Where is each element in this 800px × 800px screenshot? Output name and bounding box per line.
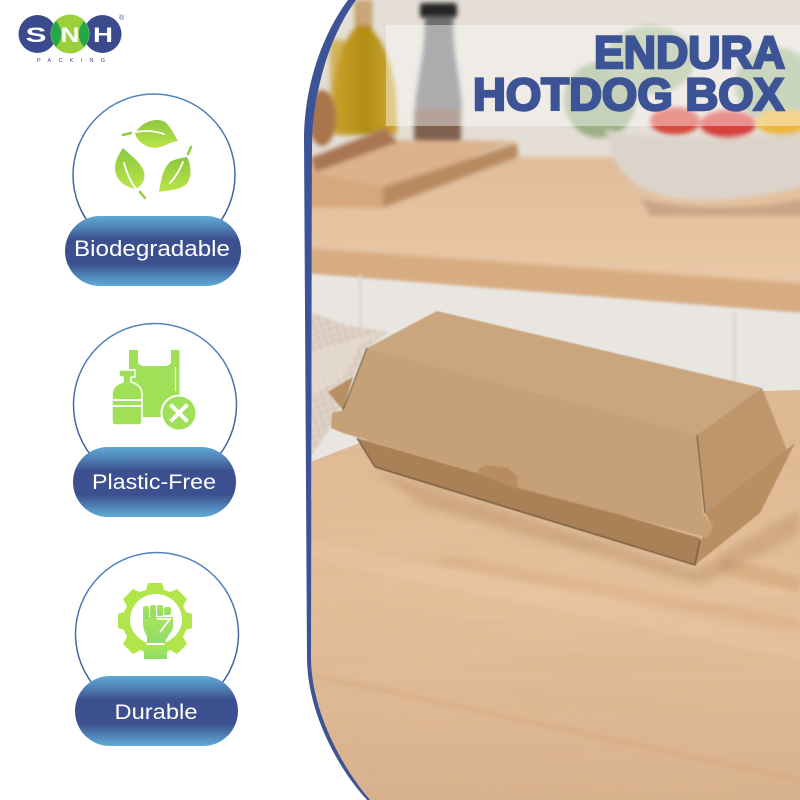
box: closure tab [477, 465, 518, 489]
logo: SNH Packing [18, 14, 125, 64]
circle outline [74, 324, 236, 486]
box: top face [367, 311, 762, 435]
photo: counter top [280, 107, 800, 316]
icon: fist in gear [118, 583, 192, 659]
photo: bowl and fruit [641, 198, 800, 217]
photo: cutting board [312, 172, 386, 210]
photo: checkered towel [311, 312, 387, 456]
circle outline [76, 552, 238, 716]
label text: Biodegradable [74, 236, 230, 261]
photo: box shadow [375, 470, 800, 585]
logo: SNH Packing: H [93, 24, 113, 47]
title band [386, 25, 800, 126]
box: right side face [697, 388, 787, 513]
logo: SNH Packing: PACKING [37, 58, 105, 64]
icon: bag and bottle with cross [112, 350, 198, 432]
photo: kitchen wall [300, 0, 800, 320]
hotdog box [328, 311, 795, 565]
photo: wooden table [300, 390, 800, 800]
feature: Durable [75, 552, 238, 746]
feature: Plastic-Free [73, 324, 236, 517]
title: HOTDOG BOX [473, 69, 784, 120]
title [473, 27, 785, 120]
logo: SNH Packing: N [60, 24, 80, 47]
box: right flap [695, 443, 795, 565]
label pill [65, 216, 241, 286]
feature: Biodegradable [65, 94, 241, 286]
photo: blurred background objects [308, 0, 800, 146]
panel border: blue arc [304, 0, 800, 800]
logo: SNH Packing: S [26, 24, 46, 47]
label pill [73, 447, 236, 517]
box: left flap [328, 377, 353, 410]
logo: SNH Packing: ® [119, 14, 125, 22]
circle outline [73, 94, 235, 256]
icon: three leaves recycling [115, 120, 191, 198]
photo: lower cabinet [280, 272, 800, 500]
box: lower tray [357, 438, 700, 565]
box: dark edges [343, 348, 705, 565]
photo: wood grain [311, 552, 800, 798]
label text: Plastic-Free [92, 471, 216, 494]
box: front face [331, 348, 713, 538]
title: ENDURA [594, 27, 785, 78]
label pill [75, 676, 238, 746]
product photo panel [280, 0, 800, 800]
label text: Durable [114, 701, 198, 724]
